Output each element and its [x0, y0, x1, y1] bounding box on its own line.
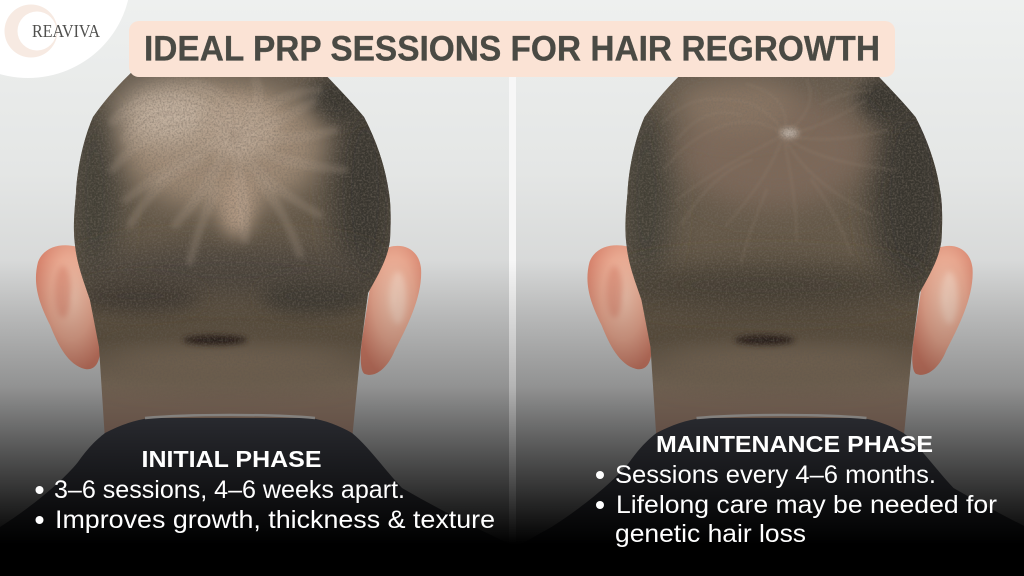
title banner: IDEAL PRP SESSIONS FOR HAIR REGROWTH — [144, 30, 880, 68]
bottom dark gradient overlay — [0, 260, 1024, 576]
divider between panels — [509, 70, 516, 576]
brand name: REAVIVA — [32, 21, 100, 41]
icon: crescent ring — [4, 4, 58, 57]
title banner — [129, 21, 895, 77]
text block: initial phase — [36, 446, 495, 534]
panel: maintenance phase photo, head after treatment — [548, 77, 1024, 532]
logo: white corner badge with brand mark — [0, 0, 131, 78]
bullet 2: Improves growth, thickness & texture — [55, 506, 495, 534]
bullet 1: 3–6 sessions, 4–6 weeks apart. — [54, 476, 405, 504]
text block: maintenance phase — [596, 431, 997, 548]
heading: maintenance phase: MAINTENANCE PHASE — [656, 431, 933, 457]
heading: initial phase: INITIAL PHASE — [142, 446, 322, 472]
bullet 2 — [596, 491, 997, 548]
bullet 2: Lifelong care may be needed for — [616, 491, 997, 519]
bullet 1: Sessions every 4–6 months. — [615, 461, 936, 489]
bullet 2: genetic hair loss — [615, 520, 806, 548]
panel: initial phase photo, head before treatment — [0, 73, 478, 530]
